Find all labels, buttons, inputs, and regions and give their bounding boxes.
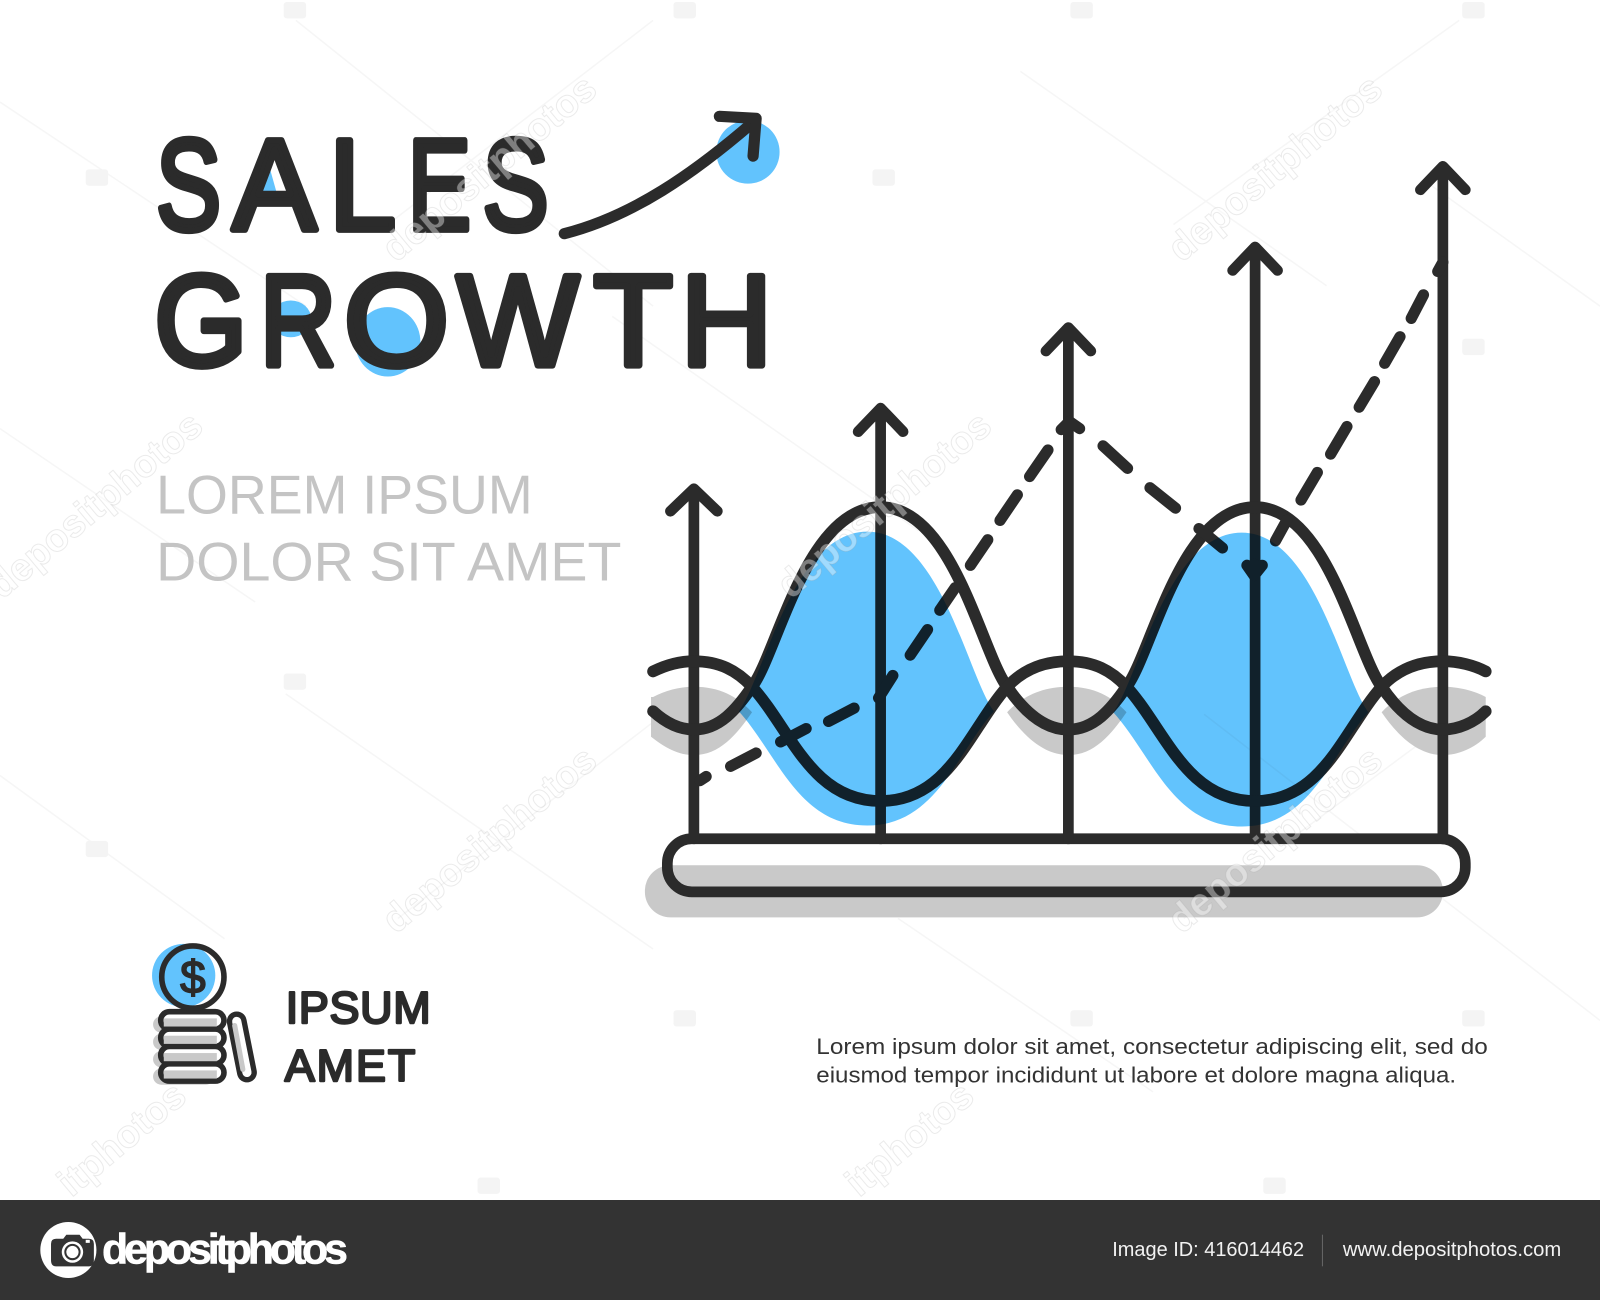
body text: eiusmod tempor incididunt ut labore et dolore magna aliqua. (816, 1063, 1456, 1088)
body text (816, 1034, 1488, 1088)
title: S (156, 114, 221, 258)
watermarks: depositphotos (1160, 67, 1391, 270)
title: H (681, 249, 772, 393)
subtitle (156, 463, 621, 593)
blue accent behind title (255, 120, 780, 377)
footer logo text: depositphotos (102, 1225, 348, 1273)
coin shadow (153, 1016, 214, 1085)
title: L (329, 114, 396, 258)
dollar coin (152, 944, 224, 1008)
chart (645, 166, 1486, 917)
watermarks: itphotos (50, 1074, 194, 1205)
chart: dashed trend line (700, 262, 1443, 781)
chart: blue peaks (739, 532, 1368, 827)
title: T (593, 249, 673, 393)
watermarks: depositphotos (769, 403, 1000, 607)
icon: coin stack (152, 944, 247, 1085)
chart: gray lobes (651, 687, 1486, 755)
title (154, 114, 772, 393)
footer logo icon (40, 1222, 96, 1278)
watermarks (0, 67, 1391, 1205)
watermarks: depositphotos (374, 738, 605, 942)
title: W (457, 249, 579, 393)
brand label: AMET (285, 1040, 415, 1091)
watermarks: depositphotos (374, 67, 605, 270)
body text: Lorem ipsum dolor sit amet, consectetur adipiscing elit, sed do (816, 1034, 1488, 1059)
coin rows (161, 1012, 224, 1081)
chart: wave curves (653, 507, 1486, 801)
dollar coin: $ (180, 951, 206, 1003)
brand label: IPSUM (286, 982, 431, 1033)
title: S (482, 114, 549, 258)
chart: base bar (645, 839, 1465, 917)
title: A (233, 114, 317, 258)
title: R (260, 249, 336, 393)
watermarks: itphotos (837, 1074, 982, 1205)
footer bar (0, 1200, 1600, 1300)
brand label (285, 982, 431, 1091)
side coin (235, 1021, 247, 1072)
title: G (154, 249, 247, 393)
subtitle: DOLOR SIT AMET (156, 531, 621, 593)
image id: Image ID: 416014462 (1112, 1239, 1304, 1261)
title: E (408, 114, 471, 258)
watermarks: depositphotos (1160, 738, 1391, 942)
title: O (344, 249, 449, 393)
website: www.depositphotos.com (1342, 1239, 1561, 1261)
icon: growth arrow (564, 116, 756, 234)
subtitle: LOREM IPSUM (156, 463, 533, 525)
chart: upward arrows (670, 166, 1465, 839)
